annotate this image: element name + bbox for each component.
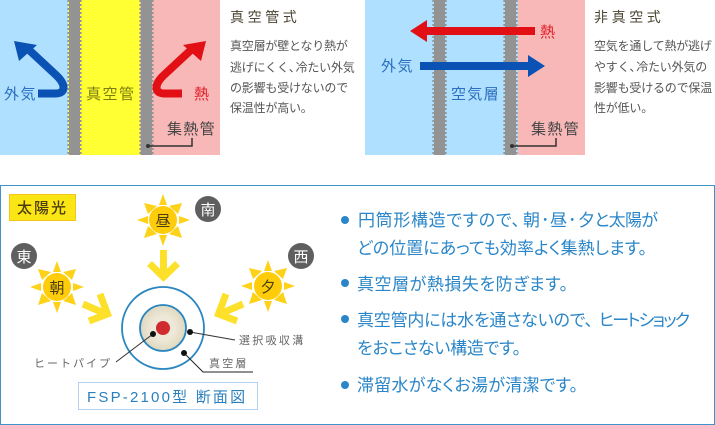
label: collector tube: 集熱管 <box>531 120 580 138</box>
diagram: tube cross section <box>122 287 204 369</box>
callout: vacuum layer <box>181 350 253 372</box>
icon: south <box>195 196 221 222</box>
icon: west <box>288 243 314 269</box>
bullet 3: ヒートショック <box>599 311 690 330</box>
text: non-vacuum description: やすく、冷たい外気の <box>594 59 707 74</box>
leader line <box>510 138 556 148</box>
leader line <box>146 138 192 148</box>
arrow: outside air <box>14 41 64 94</box>
badge: sunlight <box>10 194 76 220</box>
label: air layer: 空気層 <box>451 86 500 103</box>
callout: heat pipe: ヒートパイプ <box>34 357 112 370</box>
callout: vacuum layer: 真空層 <box>209 356 249 370</box>
bullet 3: 真空管内には水を通さないので、 <box>357 311 593 330</box>
arrow: from morning <box>83 294 108 321</box>
icon: morning sun <box>30 261 84 313</box>
arrow: from noon <box>150 250 178 277</box>
caption: model cross section: FSP-2100型 断面図 <box>87 389 247 406</box>
icon: noon sun <box>137 194 190 246</box>
text: vacuum tube description <box>230 38 355 115</box>
bullet 1 <box>341 211 658 258</box>
heading: vacuum tube type: 真空管式 <box>230 9 300 25</box>
bullet 1: ･ <box>568 211 576 230</box>
callout: heat pipe <box>34 331 156 370</box>
bullet 1: 昼 <box>550 211 567 230</box>
bullet 1: どの位置にあっても効率よく集熱します。 <box>357 239 647 258</box>
caption: model cross section <box>78 382 258 410</box>
text: non-vacuum description <box>594 38 712 115</box>
label: heat: 熱 <box>194 86 209 103</box>
panel: cross section box <box>0 186 714 424</box>
icon: morning sun: 朝 <box>49 280 65 297</box>
icon: evening sun: 夕 <box>260 279 276 296</box>
arrow: heat leaving <box>410 20 535 42</box>
text: vacuum tube description: 保温性が高い。 <box>230 100 313 115</box>
arrow: outside air entering <box>420 55 545 77</box>
arrow: heat <box>156 41 206 94</box>
icon: south: 南 <box>200 202 216 219</box>
bullet 4: 滞留水がなくお湯が清潔です。 <box>357 376 578 395</box>
bullet 1: ･ <box>541 211 550 230</box>
bullet 1: 夕と太陽が <box>578 211 658 230</box>
icon: east: 東 <box>16 249 32 266</box>
label: collector tube: 集熱管 <box>167 120 216 138</box>
text: vacuum tube description: 逃げにくく、冷たい外気 <box>230 60 355 74</box>
bullet 2: 真空層が熱損失を防ぎます。 <box>357 275 568 294</box>
label: outside air: 外気 <box>381 58 414 75</box>
heading: non-vacuum type: 非真空式 <box>594 9 664 25</box>
text: vacuum tube description: 真空層が壁となり熱が <box>230 38 348 53</box>
icon: east <box>11 243 37 269</box>
icon: noon sun: 昼 <box>155 213 171 230</box>
callout: selective absorption groove: 選択吸収溝 <box>239 333 306 347</box>
badge: sunlight: 太陽光 <box>17 200 68 217</box>
text: non-vacuum description: 影響も受けるので保温 <box>594 81 712 95</box>
arrow: from evening <box>218 294 243 321</box>
bullet 1: 円筒形構造ですので、 <box>358 211 520 230</box>
list: features <box>341 211 690 395</box>
panel: vacuum tube diagram <box>0 0 220 155</box>
text: non-vacuum description: 性が低い。 <box>594 100 653 115</box>
bullet 1: 朝 <box>523 211 540 230</box>
icon: evening sun <box>241 260 295 312</box>
text: non-vacuum description: 空気を通して熱が逃げ <box>594 38 712 53</box>
bullet 3: をおこさない構造です。 <box>357 339 521 358</box>
text: vacuum tube description: の影響も受けないので <box>230 81 348 95</box>
label: vacuum tube: 真空管 <box>86 85 136 103</box>
panel: non-vacuum diagram <box>365 0 585 155</box>
callout: selective absorption groove <box>187 329 306 347</box>
icon: west: 西 <box>293 249 309 266</box>
bullet 3 <box>341 311 690 358</box>
label: outside air: 外気 <box>4 86 37 103</box>
label: heat: 熱 <box>540 24 555 41</box>
